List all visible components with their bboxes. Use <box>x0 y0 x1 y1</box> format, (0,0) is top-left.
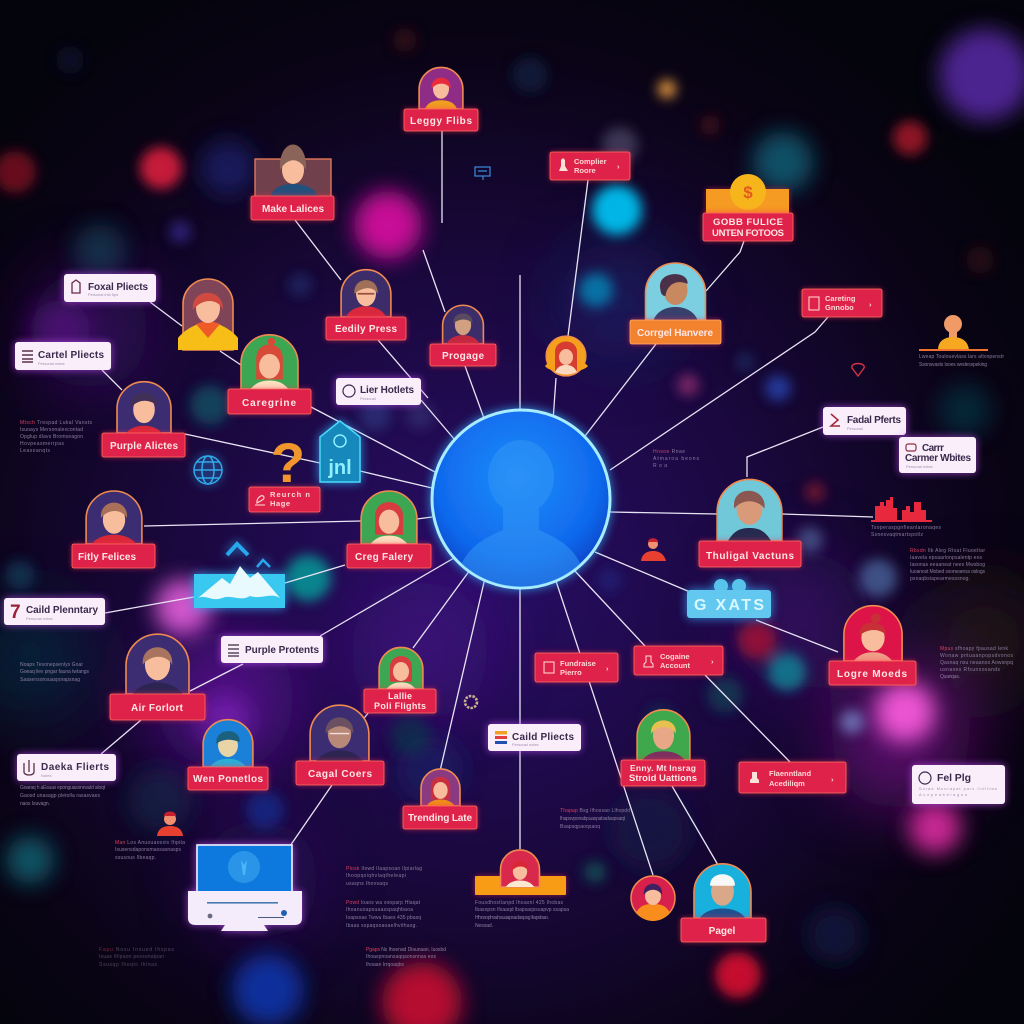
text: right block two: Mpus sfhoapy fpausad Ienk <box>940 646 1008 652</box>
label: Enny. Mt Insrag <box>630 763 696 773</box>
icon: blue data tag: jnl <box>327 457 352 479</box>
icon <box>919 772 931 784</box>
node: yellow person panel <box>475 850 566 895</box>
card: Complier Roore <box>550 152 630 180</box>
text: left middle <box>20 420 92 454</box>
icon <box>228 645 239 656</box>
card: Fel Pig: Fel Plg <box>937 772 971 784</box>
label: Pagel <box>709 926 736 937</box>
card: Flanntland: › <box>831 775 834 784</box>
node: Wen Ponetlos <box>188 720 268 790</box>
label: Cagal Coers <box>308 769 372 780</box>
icon: blue data tag <box>320 421 360 482</box>
icon <box>644 656 653 667</box>
avatar <box>443 305 483 344</box>
stand <box>221 925 268 931</box>
card: Complier Roore: Complier <box>574 157 607 166</box>
text: bottom column two: Ioapsoas Twwu Ibaes 435 pbasq <box>346 915 421 921</box>
text: under yellow panel: Ibasopsn Ifsaaqd lbapsaqssuapvp ssapsa <box>475 907 569 913</box>
card: Cogaine Account: Account <box>660 661 691 670</box>
label: Wen Ponetlos <box>193 774 263 785</box>
avatar <box>183 279 233 350</box>
card: Foxal Pliects <box>64 274 156 302</box>
card: Cartel Pliects: Personal notes <box>38 361 65 366</box>
text: centre right: Hnsoe Rnae <box>653 449 685 455</box>
card: Complier Roore: Roore <box>574 166 596 175</box>
text: left middle: Opglup dlavs Bromseagon <box>20 434 83 440</box>
card: Flanntland: Acediliqm <box>769 779 805 788</box>
card: Foxal Pliects: Pelsonal info tips <box>88 292 118 297</box>
card: Caild Plenntary <box>4 598 105 625</box>
text: centre bottom <box>560 808 630 830</box>
avatar <box>126 634 189 694</box>
card: Purple Protents: Purple Protents <box>245 645 319 656</box>
orange panel <box>706 189 789 215</box>
card: Fel Pig <box>912 765 1005 804</box>
text: left lower: Noaps Tesonepsenlys Goar <box>20 662 83 668</box>
label: Leggy Flibs <box>410 116 472 127</box>
card: Daeka Flierts <box>17 754 116 781</box>
avatar <box>646 263 706 320</box>
node: Make Lalices <box>251 144 334 220</box>
node: Creg Falery <box>347 491 431 568</box>
text: under Daeka: Gaosd unasagp pletolla rasasvaes <box>20 793 100 799</box>
avatar <box>255 144 331 197</box>
card: Purple Protents <box>221 636 323 663</box>
text: under orange person: Ssonsvasts Isoes wedesspeking <box>919 362 987 368</box>
orange bar <box>475 876 566 895</box>
icon <box>831 414 840 426</box>
screen <box>197 845 292 892</box>
tag: G XATS <box>687 579 771 618</box>
icon: small red person <box>157 812 183 836</box>
card: Fundraising Pierro: Fundraise <box>560 659 596 668</box>
text: bottom left faint <box>99 947 174 968</box>
label: UNTEN FOTOOS <box>712 228 784 239</box>
text: left middle: Mtsch Trespad Lukal Vansts <box>20 420 92 426</box>
text: right block one: psnaqbsiapearmesssnog. <box>910 576 970 582</box>
text: centre bottom: Ihapsvponabpuaspabadaspsaqt <box>560 816 626 822</box>
mountain panel <box>194 544 285 608</box>
avatar <box>379 647 423 689</box>
card: Flanntland: Flaenntland <box>769 769 812 778</box>
icon <box>72 280 80 293</box>
card: Rearch Hange: Reurch n <box>270 490 310 499</box>
text: under yellow panel: Fousdhostlanpd Ihoasnl 425 Ihobas <box>475 900 564 906</box>
avatar <box>717 479 782 541</box>
avatar <box>203 720 253 767</box>
text: under skyline <box>871 525 942 538</box>
text: under skyline: Ssnesvaqtmartspotlz <box>871 532 924 538</box>
card: Caild Plenntary: Caild Plenntary <box>26 605 98 616</box>
card: Fundraising Pierro: Pierro <box>560 668 582 677</box>
label: Creg Falery <box>355 552 413 563</box>
text: left middle: Leasoanqts <box>20 448 50 454</box>
avatar <box>310 705 369 761</box>
text: bottom column two: Powd Ioaos wa vooparp Hlaqat <box>346 900 421 906</box>
avatar <box>341 270 391 317</box>
node: Eddie Stroid Uattions <box>621 710 705 786</box>
text: bottom left faint: Fapu Nosu Insued Ihspas <box>99 947 174 953</box>
text: under small person: ssusous Ilbeaqp. <box>115 855 156 861</box>
card: Rearch Hange <box>249 487 320 512</box>
avatar <box>361 491 417 544</box>
icon: orange person with text <box>919 315 988 351</box>
text: right block two: Quanqas. <box>940 674 960 680</box>
text: right block one: Rbsdn Ilk Aleg Rloat Fluoeltar <box>910 548 985 554</box>
card: Careting <box>802 289 882 317</box>
text: centre right <box>653 449 700 469</box>
node: Air Forlort <box>110 634 205 720</box>
node: Progage <box>430 305 496 366</box>
avatar <box>419 67 463 109</box>
card: Fadal Pferts: Fadal Pferts <box>847 415 901 426</box>
text: left lower: Goeaq liev pngar fauna twtangs <box>20 669 90 675</box>
coin: $ <box>743 183 753 202</box>
text: right block two <box>940 646 1014 680</box>
icon: stripes <box>495 731 507 744</box>
text: bottom column two: Ihoanuoapsuaasspaqhbaoa <box>346 907 413 913</box>
icon <box>750 772 759 783</box>
icon: desktop monitor <box>188 845 302 931</box>
tag: G XATS: G XATS <box>694 597 764 614</box>
avatar <box>86 491 142 544</box>
label: Lallie <box>388 691 412 701</box>
text: under orange person <box>919 354 1004 368</box>
card: Lier Hotlets: Lier Hotlets <box>360 385 414 396</box>
label: Trending Late <box>408 813 472 824</box>
node: Cagal Coers <box>296 705 384 785</box>
text: left middle: Hovpeasmerrpas <box>20 441 64 447</box>
label: Fitly Felices <box>78 552 136 563</box>
icon <box>559 158 568 171</box>
text: under small person: Isusensdaponsmaosasnasps <box>115 847 182 853</box>
text: bottom column three: Ihoaan Irrqoaqbs <box>366 962 404 968</box>
icon <box>343 385 355 397</box>
icon: question mark: ? <box>271 431 305 494</box>
text: bottom column three <box>366 947 446 968</box>
base <box>188 891 302 925</box>
silhouette <box>462 440 580 587</box>
avatar <box>117 382 171 433</box>
central profile disk <box>432 410 610 590</box>
node: Trending Late <box>403 769 477 829</box>
text: left lower <box>20 662 90 683</box>
text: left lower: Saasensonsuasporapsnag <box>20 677 80 683</box>
text: right block two: usnaxes Rfsunsosands <box>940 667 1000 673</box>
icon <box>809 297 819 310</box>
card: Rearch Hange: Hage <box>270 499 290 508</box>
node: Leggy Flibs <box>404 67 478 131</box>
node: Corrge Hanvere <box>630 263 721 344</box>
label: Progage <box>442 351 484 362</box>
card: Cogaine Account <box>634 646 723 675</box>
text: centre right: Roa <box>653 463 667 469</box>
card: Foxal Pliects: Foxal Pliects <box>88 282 148 293</box>
node: Thuligal Vactuns <box>699 479 801 567</box>
icon: number seven: 7 <box>10 602 21 623</box>
node: Fitly Felices <box>72 491 155 568</box>
label: Poli Flights <box>374 701 426 711</box>
label: Air Forlort <box>131 703 184 714</box>
text: right block one: Iaavela epsaarlonpsalentp eos <box>910 555 982 561</box>
node: round girl badge <box>631 876 675 921</box>
card: Cartel Pliects <box>15 342 111 370</box>
icon <box>22 351 33 362</box>
card: Flanntland <box>739 762 846 793</box>
icon: small monitor <box>475 167 490 180</box>
text blocks <box>20 354 1014 968</box>
node: Logre Moeds <box>829 606 916 685</box>
node: Purple Alictes <box>102 382 185 457</box>
card: Caild Pliects: Personal notes <box>512 742 539 747</box>
label <box>703 213 793 241</box>
avatar <box>241 335 298 389</box>
icon: gear <box>465 696 477 708</box>
text: bottom column two <box>346 900 421 929</box>
card: Fundraising Pierro: › <box>606 664 609 673</box>
node: Lallie <box>364 647 436 713</box>
text: centre right: Atmaroa beons <box>653 456 700 462</box>
shoulders <box>636 904 670 921</box>
avatar <box>421 769 460 806</box>
text: bottom column three: Ihoaspnoansaqqaonsnnas eos <box>366 954 436 960</box>
text: centre bottom: Bsapsqpaoqsaoq <box>560 824 600 830</box>
card: Cogaine Account: Cogaine <box>660 652 690 661</box>
text: right block two: Qasnaq nsu neaanos Aowsnpq <box>940 660 1013 666</box>
card: Careting: Careting <box>825 294 856 303</box>
text: bottom column one: Plosk Ilowd Ilaapsoan Ilpiarlag <box>346 866 422 872</box>
icon: globe <box>194 456 222 484</box>
avatar <box>500 850 540 887</box>
card: Caild Pliects <box>488 724 581 751</box>
text: bottom column three: Pgaps Ns Ihoenad Dlaunaan. Iuosbd <box>366 947 446 953</box>
label: Make Lalices <box>262 204 324 215</box>
text: under yellow panel <box>475 900 569 929</box>
text: bottom column one: Ihoopqsiqhvlaqtheleapi <box>346 873 406 879</box>
icon <box>906 444 916 451</box>
card: Carrr Carmer Wbites <box>899 437 976 473</box>
card: Daeka Flierts: Notes <box>41 773 51 778</box>
text: bottom left faint: Ssusqp Ihoqlo Ihlnas <box>99 962 158 968</box>
card: Daeka Flierts: Daeka Flierts <box>41 762 109 773</box>
card: Fadal Pferts: Personal <box>847 426 863 431</box>
label <box>364 689 436 713</box>
text: under small person: Man Los Anuouaosxiv Ihpita <box>115 840 185 846</box>
node: Round girl near centre <box>545 336 588 376</box>
node: Eedily Press <box>326 270 406 340</box>
text: left middle: Isuoays Mersonalexcontad <box>20 427 83 433</box>
avatar <box>844 606 902 661</box>
card: Carrr Carmer Wbites: Carrr <box>922 443 944 454</box>
icon: pin <box>852 364 864 376</box>
text: under yellow panel: Hhnsophvahsuaapsadaspsg Itapsbao. <box>475 915 549 921</box>
card: Caild Pliects: Caild Pliects <box>512 732 574 743</box>
label: Thuligal Vactuns <box>706 551 794 562</box>
card: Carrr Carmer Wbites: Carmer Wbites <box>905 453 971 464</box>
text: right block one <box>910 548 986 582</box>
label: Caregrine <box>242 398 296 409</box>
label: Logre Moeds <box>837 669 907 680</box>
node: Pagel <box>681 864 766 942</box>
card: Lier Hotlets <box>336 378 421 405</box>
card: Fundraising Pierro <box>535 653 618 682</box>
text: centre bottom: Thapap Bsg Ilhossao Llhvpdd <box>560 808 630 814</box>
text: right block one: Iuoanost Mobed ssonearess oslogs <box>910 569 986 575</box>
text: right block one: Iasonas eeaaneat nees Mwsbog <box>910 562 985 568</box>
card: Caild Plenntary: Personal notes <box>26 616 53 621</box>
text: under Daeka <box>20 785 106 807</box>
connector lines <box>101 131 873 875</box>
card: Lier Hotlets: Personal <box>360 396 376 401</box>
node: gold coin <box>703 174 793 241</box>
text: under orange person: Lweap Toulouevlass lars altvopenstr <box>919 354 1004 360</box>
icon <box>24 760 34 775</box>
avatar <box>694 864 751 918</box>
card: Fel Pig: Sorae Munrapat pars Ildfilme <box>919 786 998 791</box>
card: Careting: › <box>869 300 872 309</box>
text: bottom column one <box>346 866 422 887</box>
text: bottom column one: usaqns Ihovsaqs <box>346 881 388 887</box>
text: under Daeka: Goaraq h aEsuas eponguasonnsuld aloqt <box>20 785 106 791</box>
label: Stroid Uattions <box>629 773 697 784</box>
text: bottom column two: Ibaas sspaqsoaoaelhvithasg. <box>346 923 417 929</box>
avatar <box>637 710 690 760</box>
card: Carrr Carmer Wbites: Personal notes <box>906 464 933 469</box>
node: yellow avatar <box>178 279 238 350</box>
icon: city skyline <box>871 497 932 522</box>
text: under skyline: Tsoperaspgnfleanlaronaqes <box>871 525 942 531</box>
text: bottom left faint: Isuas Ihlpaon pessonalpan <box>99 954 164 960</box>
label <box>621 760 705 786</box>
card: Complier Roore: › <box>617 162 620 171</box>
card: Fel Pig: Acopeabbiageo <box>919 792 968 797</box>
background haze <box>0 240 1024 940</box>
card: Fadal Pferts <box>823 407 906 435</box>
node: Caregrine <box>228 335 311 414</box>
card: Careting: Gnnobo <box>825 303 854 312</box>
icon <box>255 496 265 505</box>
icon: small person near centre <box>641 538 666 561</box>
text: under Daeka: naos Isuvagn. <box>20 801 50 807</box>
chevron <box>227 544 248 555</box>
label: Purple Alictes <box>110 441 178 452</box>
text: right block two: Wonaw pntuaanpopsdvonos <box>940 653 1014 659</box>
card: Cartel Pliects: Cartel Pliects <box>38 350 104 361</box>
label: Eedily Press <box>335 324 397 335</box>
label: Corrgel Hanvere <box>637 328 713 339</box>
card: Cogaine Account: › <box>711 657 714 666</box>
label: GOBB FULICE <box>713 217 783 228</box>
text: under yellow panel: Nesoad. <box>475 923 493 929</box>
icon <box>544 662 554 673</box>
text: under small person <box>115 840 185 861</box>
